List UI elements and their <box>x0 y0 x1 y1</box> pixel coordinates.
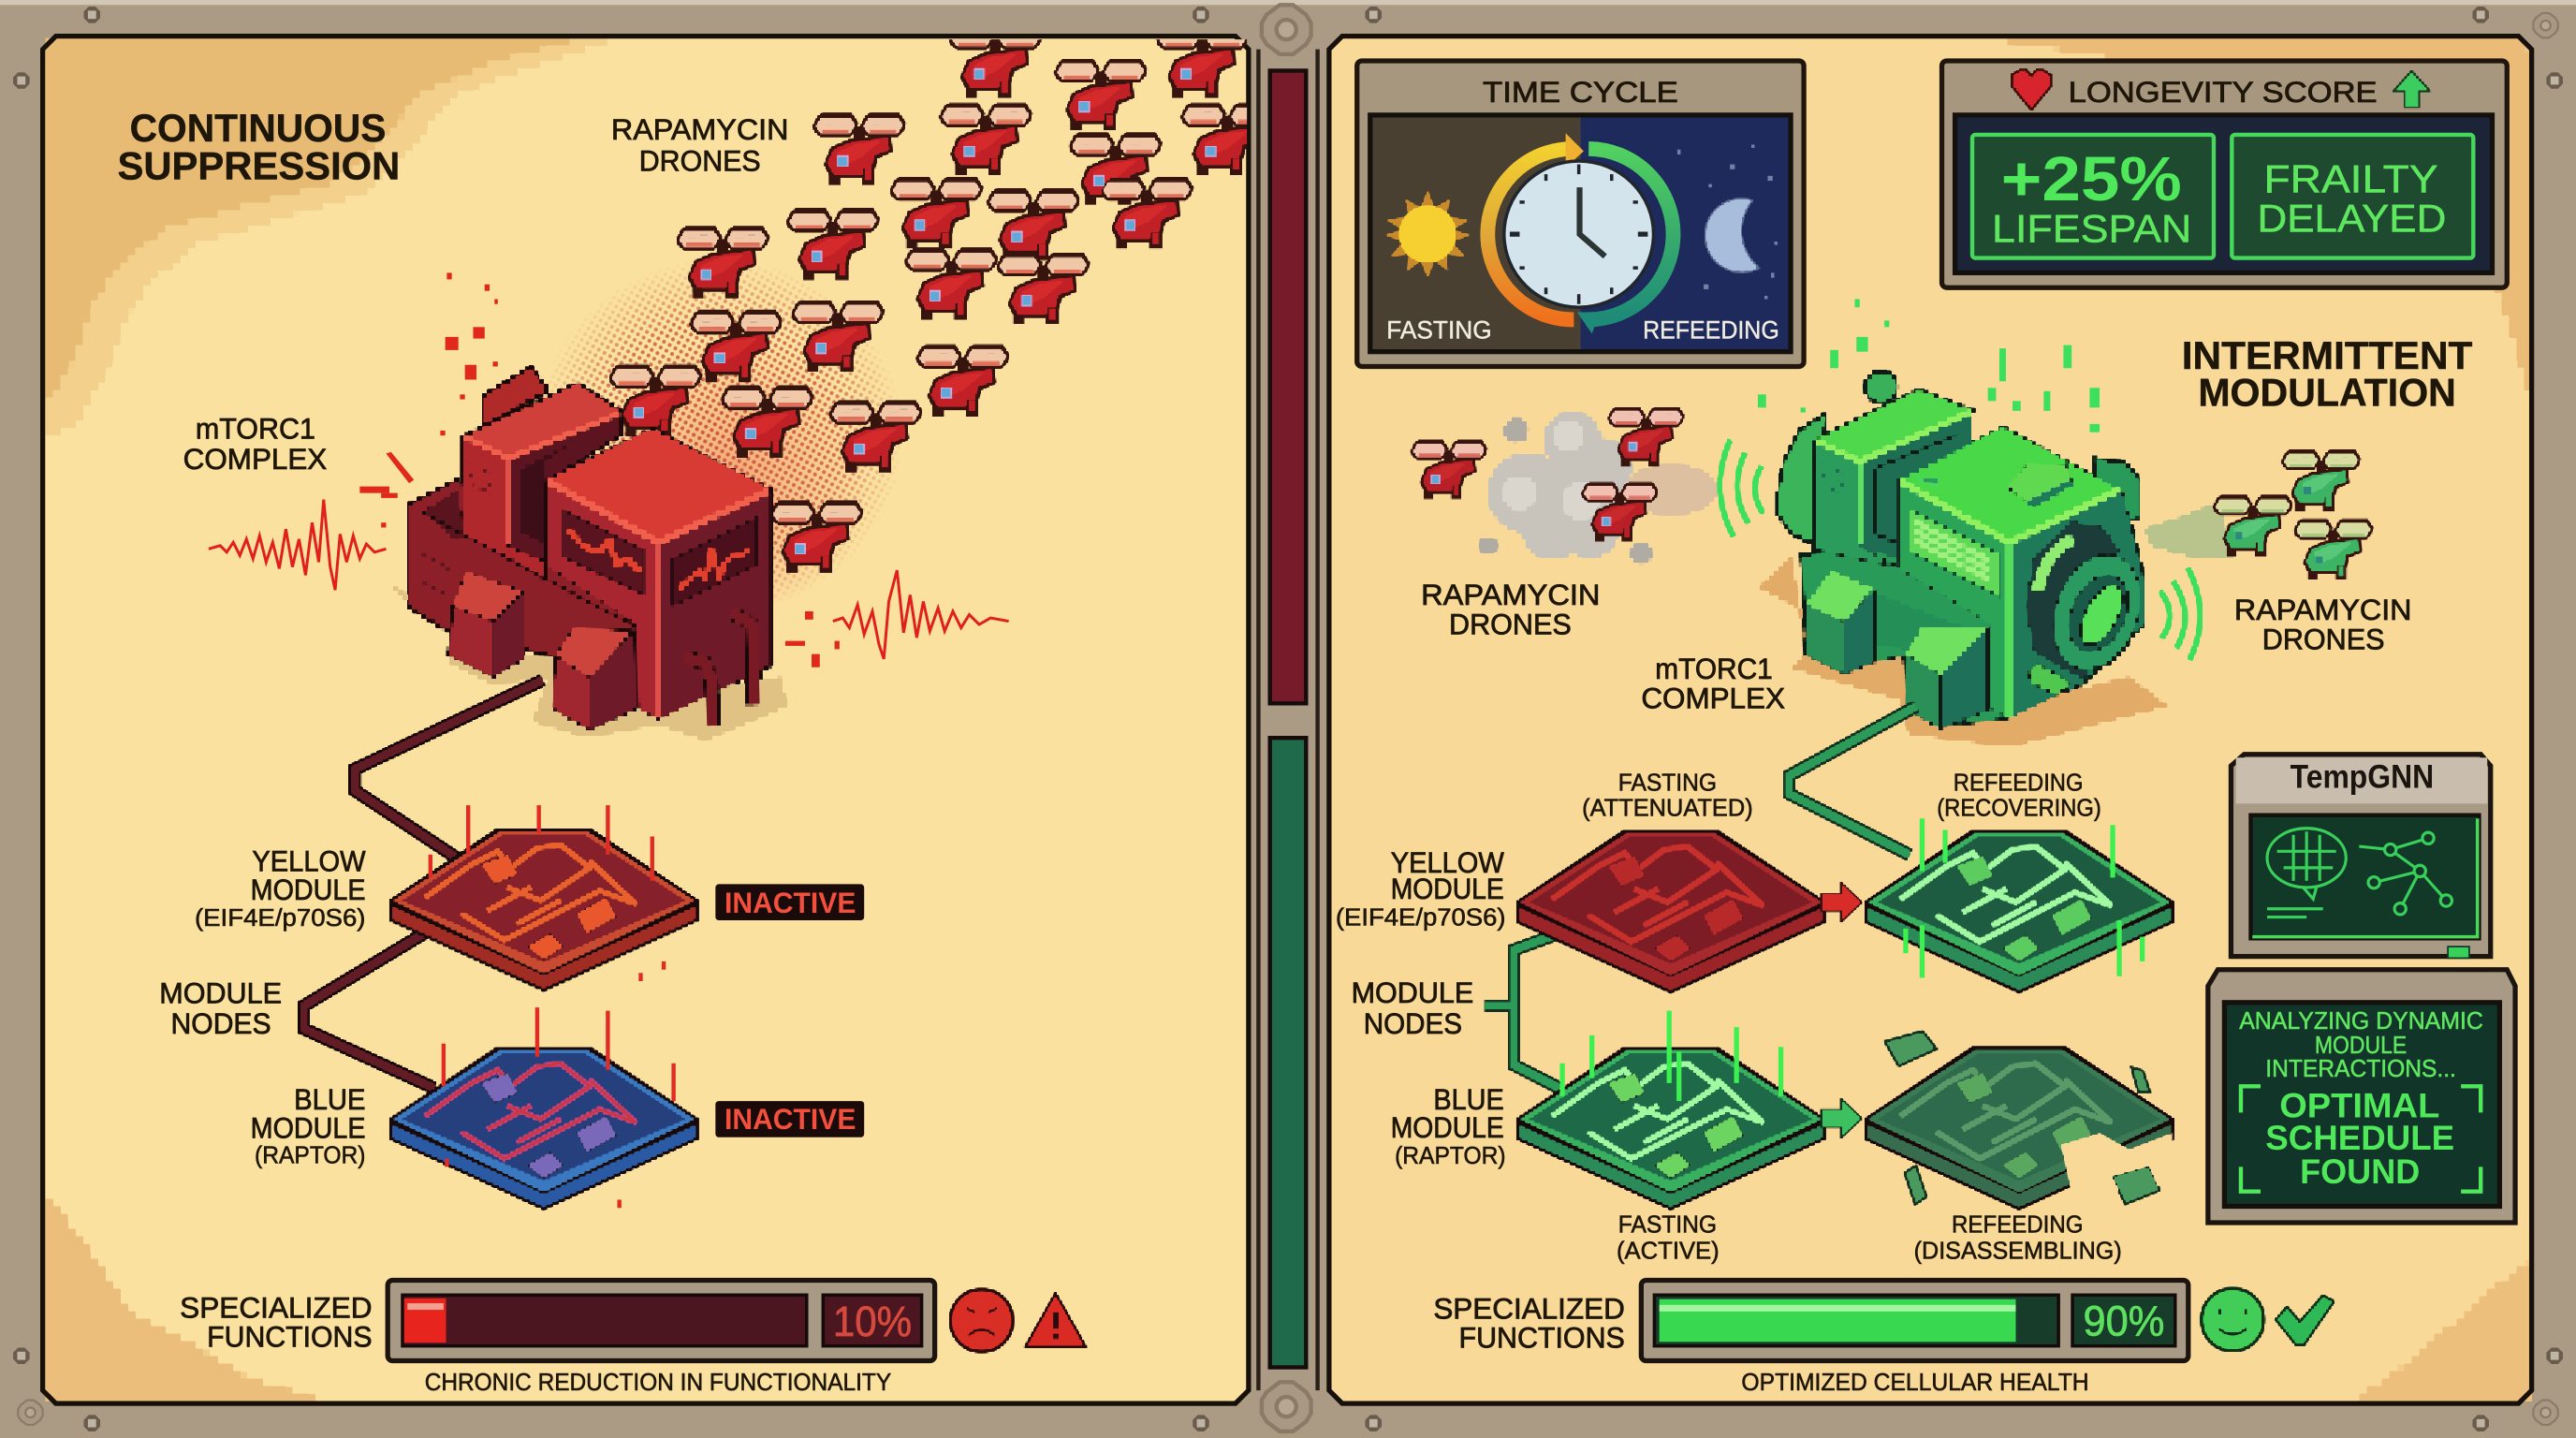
label: refeeding recovering: REFEEDING <box>1954 768 2083 796</box>
back tower slot <box>1860 412 1972 562</box>
title: intermittent modulation <box>2182 334 2472 415</box>
card frailty: DELAYED <box>2258 197 2446 241</box>
label: rapamycin drones active: RAPAMYCIN <box>2234 593 2411 626</box>
lower stud <box>2028 664 2072 695</box>
title: continuous suppression: SUPPRESSION <box>117 144 400 187</box>
module: yellow left inactive <box>389 829 698 991</box>
back vent <box>470 463 494 494</box>
front tower right face <box>658 490 770 720</box>
lens housing <box>2026 521 2119 681</box>
exhaust plume green <box>2145 503 2234 559</box>
panel: analysis terminal <box>2208 970 2515 1223</box>
percent box <box>2072 1295 2175 1346</box>
label: blue module left: (RAPTOR) <box>255 1140 366 1168</box>
module: blue refeeding disassembling <box>1865 1032 2174 1210</box>
terminal screen <box>2224 1003 2499 1206</box>
screen right <box>672 518 756 606</box>
label: yellow module left: YELLOW <box>252 844 366 877</box>
back tower left face <box>463 437 546 580</box>
divider rails <box>1258 50 1318 1390</box>
screen outline <box>1370 115 1791 352</box>
red sparks <box>359 272 840 668</box>
lens outer <box>2039 542 2156 682</box>
back bump <box>484 368 548 424</box>
label: mTORC1 complex right: mTORC1 <box>1655 652 1773 685</box>
panel: longevity score <box>1942 61 2507 287</box>
front tower top <box>1898 428 2119 543</box>
box A <box>1807 604 1844 674</box>
base panel <box>421 552 452 596</box>
card frailty <box>2232 135 2473 258</box>
label: module nodes right: NODES <box>1364 1006 1462 1040</box>
arrow bottom <box>1577 313 1600 333</box>
lens ring <box>2057 565 2140 661</box>
top vent <box>1916 476 1938 485</box>
top button <box>2007 463 2073 507</box>
right side drum <box>2094 459 2139 521</box>
label: blue module left <box>251 1082 366 1168</box>
label: blue module left: MODULE <box>251 1111 366 1145</box>
icon: happy face <box>2203 1289 2263 1350</box>
panel border <box>43 37 1249 1403</box>
panel: left continuous suppression <box>43 37 1249 1403</box>
label: rapamycin drones active <box>2234 593 2411 655</box>
box connector <box>526 594 634 653</box>
label: specialized functions right: FUNCTIONS <box>1459 1320 1625 1354</box>
label: yellow module right: YELLOW <box>1391 845 1504 879</box>
bar track <box>402 1295 807 1346</box>
label: specialized functions right: SPECIALIZED <box>1433 1292 1625 1326</box>
back tower top <box>1814 390 1972 462</box>
progress bar left: 10% <box>833 1298 912 1345</box>
module: yellow refeeding recovering <box>1865 829 2174 992</box>
label: specialized functions left <box>180 1290 373 1354</box>
icon: network graph <box>2359 832 2452 915</box>
icon: up arrow <box>2395 72 2428 107</box>
module: blue left inactive <box>389 1047 698 1210</box>
monitor body <box>2231 755 2491 957</box>
clock ring warm <box>1487 149 1573 319</box>
front edge of base <box>421 512 637 627</box>
percent box <box>823 1295 922 1346</box>
label: refeeding disassembling <box>1914 1211 2122 1265</box>
base ring <box>409 480 639 709</box>
glitch spikes red <box>431 805 674 1208</box>
screen day half <box>1370 115 1580 352</box>
panel background <box>43 37 1249 1403</box>
icon: brain <box>2267 829 2346 899</box>
label: rapamycin drones active: DRONES <box>2262 622 2385 655</box>
back knob <box>1866 372 1895 402</box>
label: module nodes right: MODULE <box>1352 976 1473 1009</box>
halftone beam <box>547 266 899 602</box>
screen left <box>562 508 643 594</box>
clock ring cool <box>1587 149 1674 319</box>
icon: heart <box>2012 70 2050 109</box>
label: module nodes left: NODES <box>171 1006 271 1040</box>
label: yellow module left <box>195 844 366 932</box>
stars <box>1677 144 1778 299</box>
left side drum <box>1778 415 1825 543</box>
exhaust plume <box>1625 465 1717 514</box>
label: refeeding recovering <box>1937 768 2101 822</box>
label: fasting attenuated: (ATTENUATED) <box>1582 794 1753 822</box>
panel body <box>1942 61 2507 287</box>
stain bottom right <box>2356 1262 2530 1401</box>
sun <box>1386 192 1469 276</box>
drone swarm <box>609 26 1273 572</box>
icon: sad face <box>951 1290 1012 1351</box>
bar frame <box>388 1280 935 1360</box>
signal wave right <box>833 570 1009 659</box>
analyzing text: ANALYZING DYNAMIC <box>2239 1008 2483 1034</box>
label: specialized functions right <box>1433 1292 1625 1354</box>
progress bar right <box>1641 1280 2188 1360</box>
label: refeeding recovering: (RECOVERING) <box>1937 794 2101 822</box>
label: rapamycin drones left <box>611 112 788 178</box>
back tower top <box>463 384 621 459</box>
moon <box>1705 199 1758 271</box>
front tower left face <box>1898 480 2010 718</box>
module: blue fasting active <box>1516 1047 1825 1210</box>
label: yellow module left: MODULE <box>251 873 366 906</box>
label: mTORC1 complex right: COMPLEX <box>1641 682 1785 715</box>
card lifespan: +25% <box>2001 145 2182 214</box>
missing chunk <box>2062 1134 2172 1196</box>
red bar <box>1270 70 1306 703</box>
readout <box>1910 508 2000 596</box>
caption: optimized cellular health: OPTIMIZED CELLULAR HEALTH <box>1741 1368 2089 1396</box>
panel: time cycle <box>1357 61 1804 366</box>
lens glass <box>2072 579 2130 652</box>
lens arc <box>2038 540 2072 590</box>
label: rapamycin drones spent: DRONES <box>1449 608 1572 641</box>
panel: right intermittent modulation <box>1329 37 2532 1403</box>
front tower right face <box>2010 490 2144 718</box>
arrow top <box>1566 133 1584 168</box>
title: intermittent modulation: INTERMITTENT <box>2182 334 2472 377</box>
card lifespan: LIFESPAN <box>1992 207 2191 251</box>
clock face <box>1504 161 1654 307</box>
bar fill <box>1660 1299 2016 1342</box>
status light <box>2448 946 2469 958</box>
bar track <box>1654 1295 2058 1346</box>
smoke cloud <box>1480 413 1717 564</box>
ground shadow <box>393 587 786 740</box>
label: mTORC1 complex left: COMPLEX <box>183 442 327 476</box>
arrow: red transition <box>1822 884 1861 920</box>
label: fasting active: FASTING <box>1618 1211 1717 1239</box>
label: rapamycin drones left: RAPAMYCIN <box>611 112 788 146</box>
stain top left <box>46 39 616 435</box>
back tower slot <box>508 415 621 562</box>
label: rapamycin drones spent: RAPAMYCIN <box>1421 578 1600 611</box>
connector <box>1879 594 1975 653</box>
label: rapamycin drones spent <box>1421 578 1600 641</box>
label: blue module left: BLUE <box>294 1082 366 1116</box>
green sound arcs right <box>2160 568 2201 659</box>
front tower left face <box>546 480 658 720</box>
monitor name: TempGNN <box>2291 759 2434 796</box>
module: yellow fasting attenuated <box>1516 829 1825 992</box>
monitor header <box>2236 757 2487 803</box>
screen night half <box>1580 115 1791 352</box>
label: refeeding disassembling: REFEEDING <box>1952 1211 2083 1239</box>
title: continuous suppression: CONTINUOUS <box>130 107 386 150</box>
label: rapamycin drones left: DRONES <box>639 144 761 178</box>
panel border <box>1329 37 2532 1403</box>
bar fill <box>404 1299 446 1343</box>
panel: analysis terminal: SCHEDULE <box>2265 1119 2454 1157</box>
label: yellow module right: MODULE <box>1391 872 1504 905</box>
label: blue module right <box>1391 1082 1506 1169</box>
result brackets <box>2241 1086 2481 1192</box>
frame top highlight <box>0 0 2576 5</box>
clock ticks <box>1510 165 1647 304</box>
green sound arcs left <box>1720 440 1763 536</box>
signal wave left <box>209 500 386 590</box>
heading: TIME CYCLE <box>1483 75 1678 109</box>
label: specialized functions left: FUNCTIONS <box>207 1320 373 1354</box>
box B <box>1905 654 1940 729</box>
panel: TempGNN monitor <box>2231 755 2491 958</box>
arrow: green transition <box>1822 1100 1861 1137</box>
label: refeeding disassembling: (DISASSEMBLING) <box>1914 1237 2122 1265</box>
label: module nodes right <box>1352 976 1473 1040</box>
label: module nodes left: MODULE <box>159 976 282 1010</box>
label: module nodes left <box>159 976 282 1040</box>
gear bottom <box>1262 1382 1311 1431</box>
label: yellow module right: (EIF4E/p70S6) <box>1336 902 1506 931</box>
panel: analysis terminal: MODULE <box>2315 1033 2407 1059</box>
back vent <box>1822 463 1847 496</box>
machine: green mTORC1 complex <box>1760 372 2166 746</box>
label: fasting active: (ACTIVE) <box>1617 1237 1720 1265</box>
label: yellow module left: (EIF4E/p70S6) <box>195 903 366 932</box>
panel background <box>1329 37 2532 1403</box>
label: fasting attenuated: FASTING <box>1618 768 1717 796</box>
title: intermittent modulation: MODULATION <box>2198 372 2456 415</box>
label: blue module right: BLUE <box>1433 1082 1504 1116</box>
box B <box>552 655 590 730</box>
central divider <box>1258 5 1318 1431</box>
label: fasting active <box>1617 1211 1720 1265</box>
ground shadow <box>1760 559 2166 746</box>
card lifespan <box>1972 135 2214 258</box>
green sparks <box>1758 299 2100 433</box>
progress bar left <box>388 1280 935 1360</box>
label: blue module right: MODULE <box>1391 1110 1504 1144</box>
label: mTORC1 complex left <box>183 412 327 476</box>
cables right <box>1486 707 1915 1088</box>
rivets and corner gears <box>84 7 100 23</box>
time labels: FASTING <box>1386 315 1492 345</box>
result text: OPTIMAL <box>2279 1087 2439 1125</box>
box A <box>449 606 493 678</box>
screen <box>1955 115 2492 272</box>
green energy spikes <box>1562 818 2143 1101</box>
cloud <box>1488 413 1632 559</box>
panel: time cycle: REFEEDING <box>1643 315 1779 345</box>
caption: chronic reduction: CHRONIC REDUCTION IN FUNCTIONALITY <box>425 1368 891 1396</box>
label: specialized functions left: SPECIALIZED <box>180 1290 373 1324</box>
active green drones <box>2214 450 2373 580</box>
badge: inactive blue: INACTIVE <box>724 1102 856 1136</box>
icon: warning triangle <box>1027 1295 1084 1346</box>
label: blue module right: (RAPTOR) <box>1395 1141 1506 1169</box>
monitor screen <box>2250 815 2479 938</box>
debris <box>1886 1032 2159 1203</box>
card frailty: FRAILTY <box>2264 156 2438 200</box>
label: yellow module right <box>1336 845 1506 931</box>
gear top <box>1262 5 1311 54</box>
terminal body <box>2208 970 2515 1223</box>
stain bottom left <box>46 1193 320 1401</box>
base <box>1802 547 2010 727</box>
bar frame <box>1641 1280 2188 1360</box>
label: mTORC1 complex left: mTORC1 <box>196 412 315 446</box>
panel body <box>1357 61 1804 366</box>
label: fasting attenuated <box>1582 768 1753 822</box>
label: mTORC1 complex right <box>1641 652 1785 715</box>
machine: red mTORC1 complex <box>393 368 786 740</box>
panel: analysis terminal: FOUND <box>2300 1152 2420 1191</box>
badge: inactive yellow: INACTIVE <box>724 886 856 919</box>
cables left <box>304 681 542 1088</box>
panel: analysis terminal: INTERACTIONS... <box>2265 1056 2456 1082</box>
icon: check mark <box>2277 1297 2333 1344</box>
clock hands <box>1580 187 1605 257</box>
heading: LONGEVITY SCORE <box>2069 75 2378 109</box>
title: continuous suppression <box>117 107 400 187</box>
front tower top <box>546 429 770 543</box>
stain top right <box>1995 39 2530 394</box>
pipes <box>685 657 713 727</box>
text lines <box>2267 909 2323 917</box>
progress bar right: 90% <box>2083 1297 2164 1344</box>
green bar <box>1270 738 1306 1368</box>
back tower left face <box>1814 440 1900 568</box>
spent red drones <box>1412 407 1684 540</box>
